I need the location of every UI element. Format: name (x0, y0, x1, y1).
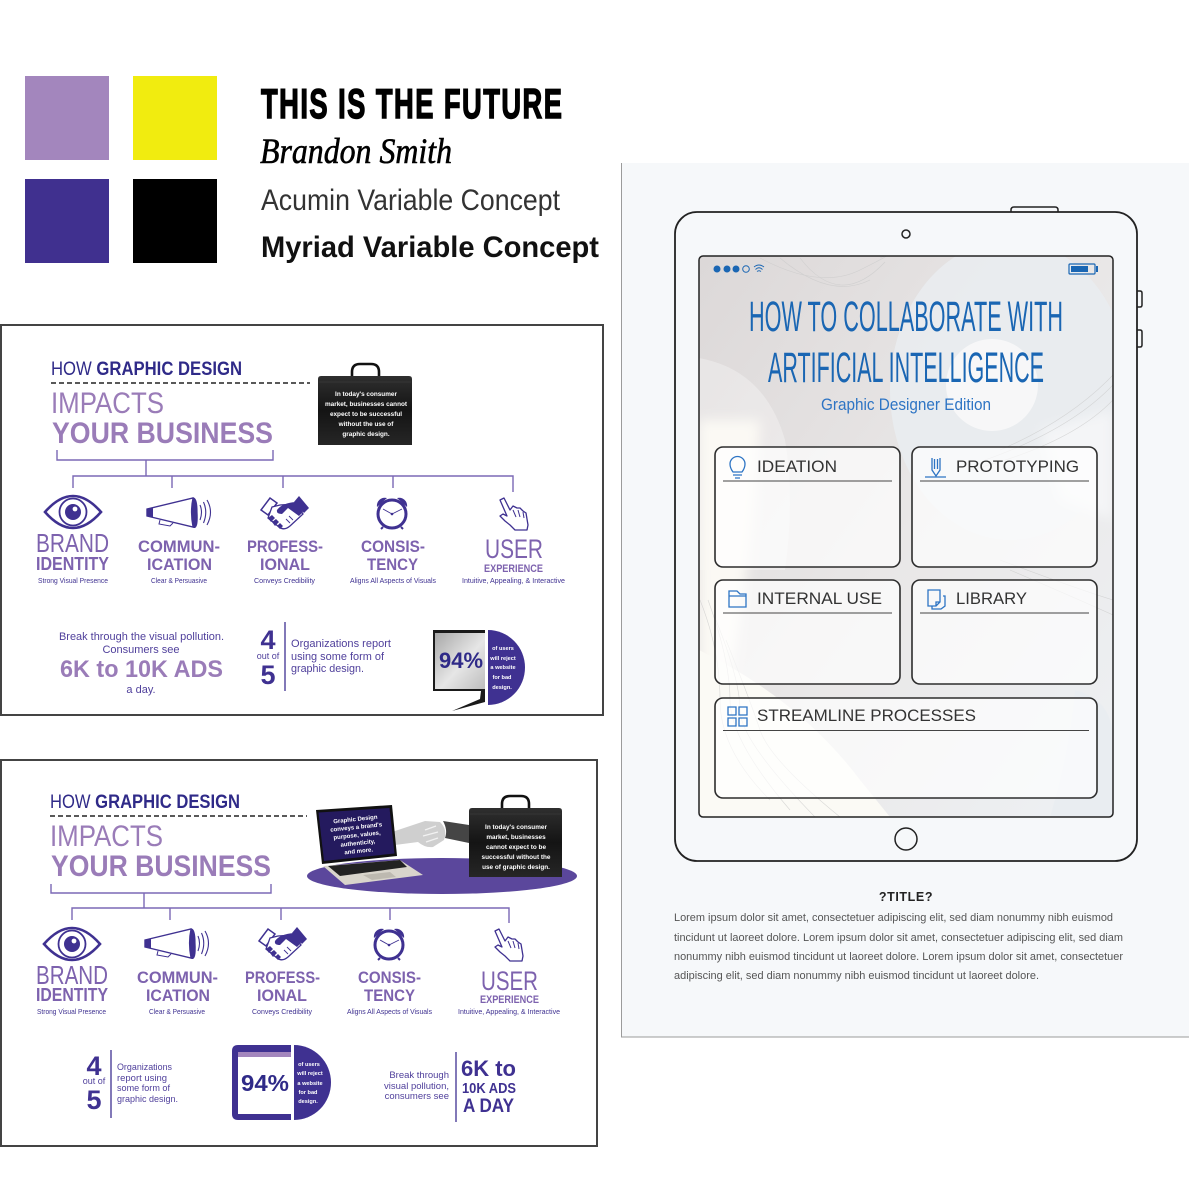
stat: 4 out of 5: 4 (86, 1051, 102, 1081)
stat: 94 percent browser tablet: of users (298, 1062, 320, 1068)
label: consistency (350, 537, 436, 585)
title: Graphic Designer Edition (821, 395, 991, 414)
stat: 94 percent browser tablet: design. (298, 1099, 318, 1105)
status bar icons (714, 264, 1098, 274)
label: brand identity: BRAND (36, 960, 108, 990)
icon: clock (374, 929, 404, 960)
text block: placeholder copy (674, 890, 1123, 982)
illustration: laptop and briefcase handshake: market, businesses (486, 834, 546, 841)
font specimens: THIS IS THE FUTURE (261, 80, 562, 127)
font specimens: Myriad Variable Concept (261, 231, 599, 264)
heading: YOUR BUSINESS (52, 417, 273, 450)
label: user experience (458, 966, 560, 1016)
text block: placeholder copy: tincidunt ut laoreet dolore. Lorem ipsum dolor sit amet, consectetuer adipiscing elit, sed diam (674, 932, 1123, 944)
font specimens: Brandon Smith (260, 131, 452, 171)
label: brand identity: Strong Visual Presence (37, 1007, 106, 1016)
stat: 4 out of 5: 5 (260, 660, 276, 690)
stat: 94 percent monitor: of users (492, 646, 514, 652)
label: user experience (462, 534, 565, 585)
stat: ads per day (384, 1052, 516, 1122)
tablet device (675, 207, 1142, 861)
heading (51, 359, 310, 450)
stat: 94 percent monitor: design. (492, 685, 512, 691)
heading: YOUR BUSINESS (51, 850, 271, 883)
stat: 4 out of 5 (257, 622, 391, 691)
label: brand identity (36, 960, 108, 1016)
stat: ads per day: Break through (389, 1070, 449, 1081)
heading: HOW GRAPHIC DESIGN (51, 359, 242, 380)
stat: ads per day: a day. (126, 684, 156, 696)
screen outline (699, 256, 1113, 817)
illustration: laptop and briefcase handshake: use of graphic design. (482, 864, 550, 871)
text block: placeholder copy: adipiscing elit, sed diam nonummy nibh euismod tincidunt ut laoreet dolore. (674, 970, 1039, 982)
panel: tablet page (621, 163, 1189, 1037)
illustration: laptop and briefcase handshake: In today's consumer (485, 824, 547, 831)
stat: ads per day: Break through the visual pollution. (59, 631, 224, 643)
illustration: laptop and briefcase handshake: and more. (344, 847, 374, 856)
stat: 4 out of 5: Organizations report (291, 638, 391, 650)
stat: 4 out of 5: out of (83, 1076, 106, 1086)
icon: megaphone (145, 929, 208, 958)
icon: megaphone (147, 498, 210, 527)
label: professional: Conveys Credibility (252, 1007, 312, 1016)
stat: 4 out of 5: some form of (117, 1083, 170, 1094)
label: communication (138, 537, 220, 585)
card: internal use: INTERNAL USE (757, 590, 882, 608)
label: consistency: TENCY (364, 986, 416, 1005)
stat: 4 out of 5: report using (117, 1073, 167, 1084)
label: brand identity (36, 528, 109, 585)
stat: 4 out of 5: using some form of (291, 651, 385, 663)
text block: placeholder copy: Lorem ipsum dolor sit amet, consectetuer adipiscing elit, sed diam nonummy nibh euismod (674, 912, 1113, 924)
label: brand identity: Strong Visual Presence (38, 576, 108, 585)
briefcase callout: graphic design. (342, 431, 390, 438)
icon: pointer hand (495, 929, 523, 961)
card: streamline processes: STREAMLINE PROCESSES (757, 707, 976, 725)
label: communication: Clear & Persuasive (151, 576, 207, 585)
panel: infographic version one (1, 325, 603, 715)
label: communication: ICATION (146, 986, 210, 1005)
stat: ads per day: 6K to (461, 1056, 516, 1081)
label: user experience: Intuitive, Appealing, & Interactive (462, 576, 565, 585)
label: communication: COMMUN- (138, 537, 220, 556)
stat: 4 out of 5: graphic design. (291, 663, 364, 675)
illustration: laptop and briefcase handshake: conveys a brand's (330, 822, 383, 834)
stat: 4 out of 5: 4 (260, 625, 276, 655)
icon: eye (45, 496, 101, 528)
stat: 94 percent monitor: will reject (489, 656, 516, 662)
label: professional: PROFESS- (245, 968, 320, 987)
label: consistency: CONSIS- (361, 537, 425, 556)
stat: 4 out of 5: graphic design. (117, 1094, 178, 1105)
label: communication: ICATION (147, 555, 212, 574)
text block: placeholder copy: nonummy nibh euismod tincidunt ut laoreet dolore. Lorem ipsum dolor sit amet, consectetuer (674, 951, 1123, 963)
stat: 94 percent monitor: a website (490, 665, 516, 671)
stat: 4 out of 5 (83, 1050, 178, 1118)
illustration: laptop and briefcase handshake: Graphic Design (333, 815, 378, 825)
card: ideation (715, 447, 900, 567)
font specimens (260, 80, 599, 264)
briefcase callout (318, 364, 412, 445)
card: prototyping: PROTOTYPING (956, 458, 1079, 476)
label: consistency: Aligns All Aspects of Visuals (350, 576, 436, 585)
label: consistency: TENCY (367, 555, 419, 574)
stat: 94 percent browser tablet: will reject (296, 1071, 323, 1077)
label: professional: IONAL (257, 986, 307, 1005)
heading: HOW GRAPHIC DESIGN (50, 792, 240, 813)
label: communication: Clear & Persuasive (149, 1007, 205, 1016)
label: consistency (347, 968, 432, 1016)
card: streamline processes (715, 698, 1097, 798)
icon: eye (44, 928, 100, 960)
stat: 4 out of 5: Organizations (117, 1062, 172, 1073)
label: brand identity: IDENTITY (36, 985, 108, 1005)
label: professional: Conveys Credibility (254, 576, 315, 585)
label: consistency: CONSIS- (358, 968, 421, 987)
icon: handshake (261, 496, 309, 529)
stat: 94 percent monitor: 94% (439, 648, 483, 673)
stat: 94 percent browser tablet: 94% (241, 1070, 289, 1096)
heading: IMPACTS (51, 387, 164, 420)
stat: 94 percent browser tablet: a website (297, 1081, 323, 1087)
briefcase callout: without the use of (338, 421, 394, 428)
label: professional (245, 968, 320, 1016)
stat: 94 percent browser tablet (232, 1045, 331, 1120)
stat: 94 percent monitor (433, 630, 525, 711)
illustration: laptop and briefcase handshake (307, 796, 577, 894)
label: communication: COMMUN- (137, 968, 218, 987)
illustration: laptop and briefcase handshake: successful without the (482, 854, 551, 861)
org chart connector (57, 450, 513, 492)
text block: placeholder copy: ?TITLE? (879, 890, 933, 904)
card: internal use (715, 580, 900, 684)
label: communication (137, 968, 218, 1016)
illustration: laptop and briefcase handshake: cannot expect to be (486, 844, 546, 851)
card: library: LIBRARY (956, 590, 1027, 608)
icon: handshake (259, 927, 307, 960)
label: professional (247, 537, 323, 585)
stat: 94 percent monitor: for bad (493, 675, 512, 681)
stat: ads per day: 10K ADS (462, 1080, 516, 1097)
font specimens: Acumin Variable Concept (261, 184, 561, 217)
label: user experience: Intuitive, Appealing, & Interactive (458, 1007, 560, 1016)
label: professional: PROFESS- (247, 537, 323, 556)
label: user experience: EXPERIENCE (484, 563, 543, 575)
stat: ads per day (59, 631, 224, 696)
illustration: laptop and briefcase handshake: purpose, values, (333, 831, 381, 841)
title (749, 293, 1063, 414)
label: brand identity: BRAND (36, 528, 109, 558)
stat: 94 percent browser tablet: for bad (299, 1090, 318, 1096)
heading (50, 792, 307, 883)
label: user experience: EXPERIENCE (480, 994, 539, 1006)
icon: clock (377, 498, 407, 529)
stat: ads per day: 6K to 10K ADS (60, 656, 223, 683)
briefcase callout: market, businesses cannot (325, 401, 408, 408)
illustration: laptop and briefcase handshake: authenticity, (340, 839, 376, 849)
card: prototyping (912, 447, 1097, 567)
briefcase callout: expect to be successful (330, 411, 402, 418)
icon: pointer hand (500, 498, 528, 530)
panel: infographic version two (1, 760, 597, 1146)
stat: ads per day: A DAY (463, 1096, 514, 1117)
org chart connector (51, 884, 509, 923)
stat: ads per day: visual pollution, (384, 1081, 449, 1092)
label: professional: IONAL (260, 555, 310, 574)
stat: ads per day: Consumers see (102, 644, 180, 656)
card: library (912, 580, 1097, 684)
heading: IMPACTS (50, 820, 163, 853)
label: user experience: USER (481, 966, 538, 996)
colour swatches (25, 76, 217, 263)
briefcase callout: In today's consumer (335, 391, 397, 398)
label: brand identity: IDENTITY (36, 554, 109, 574)
stat: ads per day: consumers see (385, 1091, 449, 1102)
stat: 4 out of 5: out of (257, 651, 280, 661)
card: ideation: IDEATION (757, 458, 837, 476)
stat: 4 out of 5: 5 (86, 1085, 102, 1115)
label: user experience: USER (485, 534, 543, 564)
label: consistency: Aligns All Aspects of Visuals (347, 1007, 432, 1016)
tablet screen background (699, 240, 1130, 820)
